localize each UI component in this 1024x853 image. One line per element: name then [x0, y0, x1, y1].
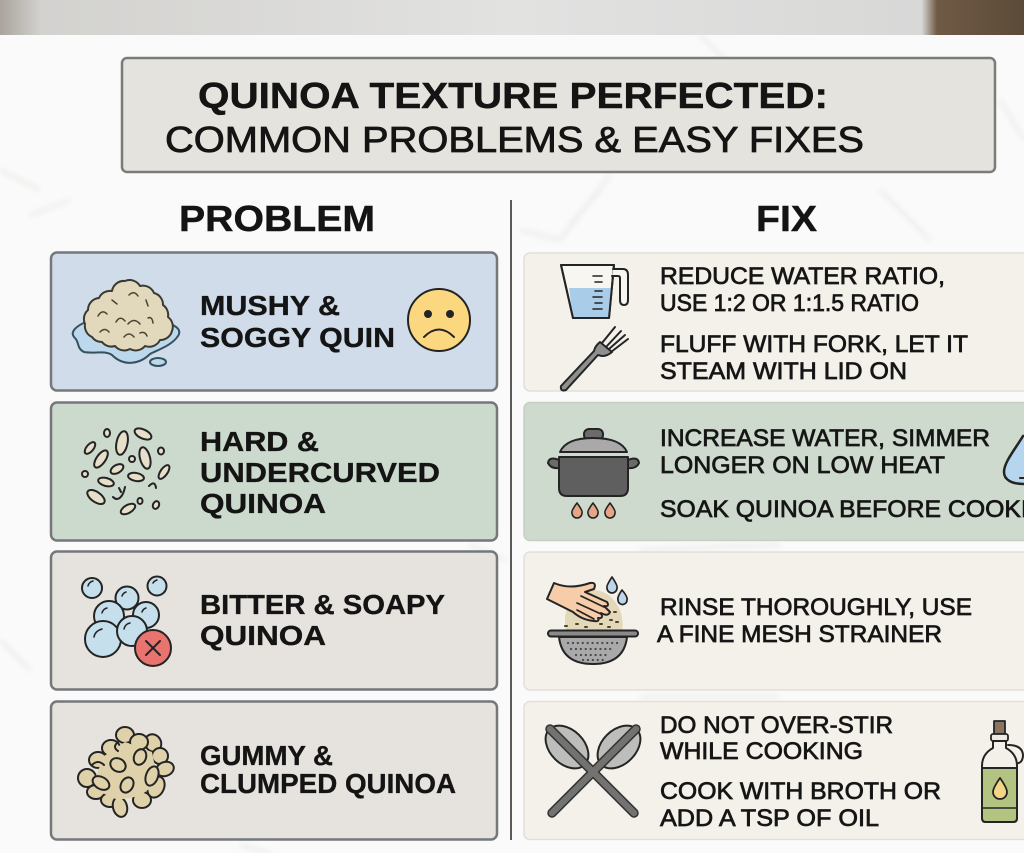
heading: problem: PROBLEM [179, 198, 375, 239]
panel: fixes for gummy [524, 702, 1024, 840]
panel: bitter problem [51, 552, 497, 690]
title panel [122, 58, 995, 172]
problem text: bitter: BITTER & SOAPY [200, 589, 445, 620]
problem text: hard: HARD & [200, 426, 319, 457]
heading: fix: FIX [756, 198, 817, 239]
icon: gummy clump [78, 727, 176, 818]
icon: water drop [1004, 436, 1024, 484]
column divider [510, 200, 512, 840]
icon: hard scattered grains [82, 426, 171, 516]
icon: mushy quinoa in puddle [73, 280, 179, 366]
icon: hand rinsing in strainer [547, 577, 638, 664]
fix text: fluff: FLUFF WITH FORK, LET IT [660, 331, 968, 358]
fix text: reduce water: REDUCE WATER RATIO, [660, 263, 945, 290]
problem text: soggy: SOGGY QUIN [200, 322, 395, 353]
panel: hard problem [51, 402, 497, 540]
icon: pot on burner [548, 429, 639, 518]
fix text: increase water: INCREASE WATER, SIMMER [660, 425, 990, 452]
fix text: do not over-stir: DO NOT OVER-STIR [660, 712, 893, 739]
icon: sad face [408, 289, 470, 351]
fix text: longer: LONGER ON LOW HEAT [660, 452, 945, 479]
fix text: ratio: USE 1:2 OR 1:1.5 RATIO [660, 290, 919, 317]
fix text: add oil: ADD A TSP OF OIL [660, 805, 879, 832]
problem text: gummy: GUMMY & [200, 740, 333, 771]
icon: measuring cup [561, 265, 628, 318]
fix text: cook with broth: COOK WITH BROTH OR [660, 778, 941, 805]
fix text: rinse: RINSE THOROUGHLY, USE [660, 594, 972, 621]
fix text: while cooking: WHILE COOKING [660, 738, 863, 765]
title line 1: QUINOA TEXTURE PERFECTED: [198, 75, 828, 116]
icon: fork [561, 327, 628, 390]
problem text: quinoa: QUINOA [200, 488, 326, 519]
problem text: clumped: CLUMPED QUINOA [200, 768, 456, 799]
panel: fixes for mushy [524, 253, 1024, 391]
fix text: steam: STEAM WITH LID ON [660, 358, 907, 385]
fix text: strainer: A FINE MESH STRAINER [657, 621, 942, 648]
panel: gummy problem [51, 702, 497, 840]
background: blurred top band [0, 0, 1024, 35]
panel: fixes for hard [524, 402, 1024, 540]
panel: fix for bitter [524, 552, 1024, 690]
problem text: undercurved: UNDERCURVED [200, 457, 440, 488]
problem text: mushy: MUSHY & [200, 290, 340, 321]
panel: mushy problem [51, 252, 497, 390]
icon: crossed spoons [537, 717, 649, 813]
problem text: quinoa: QUINOA [200, 620, 326, 651]
title line 2: COMMON PROBLEMS & EASY FIXES [165, 119, 864, 160]
icon: oil bottle [982, 721, 1023, 822]
icon: soap bubbles with red cross [82, 576, 171, 666]
